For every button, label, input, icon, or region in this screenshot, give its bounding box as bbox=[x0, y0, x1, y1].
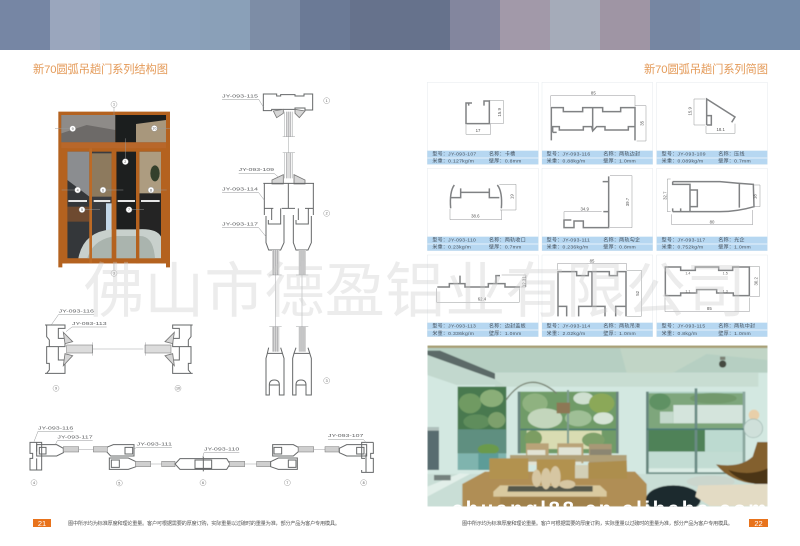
numbers: 7 bbox=[286, 481, 288, 485]
labels: JY-093-110 bbox=[204, 447, 240, 453]
labels: JY-093-116 bbox=[38, 425, 74, 431]
door callout leader lines bbox=[55, 107, 170, 270]
card caption text: 米重：0.23kg/m bbox=[432, 244, 471, 251]
card caption text: 米重：0.236kg/m bbox=[547, 244, 588, 251]
central meeting sash 6 bbox=[175, 457, 271, 471]
card caption text: 米重：2.02kg/m bbox=[547, 330, 585, 337]
labels: JY-093-113 bbox=[72, 321, 107, 327]
right sash JY-093-117 bbox=[293, 208, 311, 250]
part labels: JY-093-114 bbox=[222, 187, 258, 193]
door callout numbers: 4 bbox=[77, 188, 79, 192]
profile JY-093-116: 85 bbox=[591, 90, 596, 95]
profile JY-093-113 bbox=[437, 275, 526, 302]
section numbers: 2 bbox=[326, 212, 328, 216]
sliding door glass panels bbox=[61, 148, 166, 263]
card caption text: 名称：两轨中封 bbox=[718, 323, 755, 330]
numbers: 5 bbox=[118, 481, 120, 485]
labels bbox=[34, 425, 367, 457]
card caption text bbox=[432, 151, 755, 337]
head profile JY-093-115 bbox=[263, 94, 313, 111]
card caption text: 米重：0.336kg/m bbox=[432, 330, 474, 337]
card caption text: 米重：0.127kg/m bbox=[432, 158, 474, 165]
profile JY-093-115: 1.1 bbox=[685, 289, 690, 293]
profile JY-093-107: 15.9 bbox=[497, 108, 502, 117]
door callout numbers: 10 bbox=[152, 127, 156, 131]
profile JY-093-107: 17 bbox=[476, 128, 481, 133]
door callout numbers: 2 bbox=[124, 160, 126, 164]
profile JY-093-113: 62.4 bbox=[478, 297, 487, 302]
numbers: 9 bbox=[55, 387, 57, 391]
profile JY-093-109: 18.1 bbox=[716, 127, 725, 132]
left footnote: 图中所示均为标准厚度和理论重量。客户可根据需要的厚度订购，实际重量以过磅时的重量为准，部分产品为客户专用模具。 bbox=[68, 519, 340, 527]
section numbers: 1 bbox=[326, 99, 328, 103]
upper interlock 5 bbox=[93, 445, 134, 456]
lower glazing beads bbox=[272, 175, 305, 184]
lower interlock 7 bbox=[271, 458, 297, 469]
jamb 4 bbox=[30, 442, 93, 470]
profile JY-093-110: 38.6 bbox=[471, 214, 480, 219]
card caption text: 型号：JY-093-113 bbox=[432, 323, 476, 330]
card frames bbox=[427, 82, 767, 337]
profile JY-093-109: 15.9 bbox=[688, 107, 693, 116]
card caption text: 名称：两轨收口 bbox=[489, 237, 526, 244]
right footnote: 图中所示均为标准厚度和理论重量。客户可根据需要的厚度订购，实际重量以过磅时的重量为准，部分产品为客户专用模具。 bbox=[462, 519, 733, 527]
profile JY-093-111 bbox=[564, 176, 632, 228]
numbers bbox=[31, 480, 367, 486]
card caption text: 壁厚：0.7mm bbox=[489, 244, 522, 251]
labels: JY-093-107 bbox=[328, 433, 364, 439]
profile JY-093-114: 85 bbox=[590, 259, 595, 264]
card caption text: 名称：两轨勾企 bbox=[603, 237, 640, 244]
card caption text: 米重：0.752kg/m bbox=[662, 244, 703, 251]
card caption bars bbox=[427, 151, 767, 337]
profile JY-093-115 bbox=[665, 266, 759, 312]
numbers: 4 bbox=[33, 481, 35, 485]
upper glazing beads bbox=[273, 109, 305, 118]
profile JY-093-114 bbox=[557, 259, 641, 316]
bottom sash left bbox=[266, 348, 284, 395]
card caption text: 壁厚：1.0mm bbox=[489, 330, 522, 337]
part labels: JY-093-115 bbox=[222, 93, 258, 99]
left page number: 21 bbox=[38, 519, 46, 528]
labels: JY-093-116 bbox=[59, 309, 94, 315]
left page number bbox=[33, 519, 51, 528]
card caption text: 型号：JY-093-116 bbox=[547, 151, 590, 158]
profile JY-093-115: 1.3 bbox=[723, 289, 728, 293]
photo domain watermark: chuangl88.cn.alibaba.com bbox=[452, 497, 767, 520]
profile JY-093-115: 85 bbox=[707, 306, 712, 311]
card caption text: 型号：JY-093-109 bbox=[662, 151, 706, 158]
profile JY-093-117: 18 bbox=[753, 194, 758, 199]
lower interlock 5 bbox=[109, 458, 175, 469]
part labels: JY-093-117 bbox=[222, 222, 258, 228]
profile JY-093-116: 35 bbox=[639, 120, 644, 126]
card caption text: 米重：0.089kg/m bbox=[662, 158, 703, 165]
interior living room photo bbox=[427, 345, 768, 520]
right page number bbox=[749, 519, 768, 528]
labels: JY-093-117 bbox=[57, 435, 93, 441]
card caption text: 型号：JY-093-110 bbox=[432, 237, 476, 244]
card caption text: 名称：卡槽 bbox=[489, 151, 515, 158]
left jamb bbox=[45, 325, 93, 373]
card caption text: 名称：两轨边封 bbox=[603, 151, 640, 158]
card caption text: 壁厚：1.0mm bbox=[603, 158, 636, 165]
left sash JY-093-117 bbox=[266, 208, 284, 250]
labels: JY-093-111 bbox=[137, 441, 172, 447]
jamb 8 bbox=[339, 442, 373, 472]
lower glass upper segments bbox=[269, 250, 308, 352]
profile catalogue cards bbox=[427, 82, 767, 337]
profile JY-093-111: 34.9 bbox=[580, 207, 589, 212]
bottom sash right bbox=[293, 348, 311, 395]
right page title: 新70圆弧吊趟门系列简图 bbox=[644, 62, 768, 76]
profile JY-093-117: 80 bbox=[710, 219, 715, 224]
door leaf divider rail bbox=[61, 142, 166, 148]
card caption text: 型号：JY-093-117 bbox=[662, 237, 705, 244]
right page number: 22 bbox=[754, 519, 763, 528]
card caption text: 型号：JY-093-111 bbox=[547, 237, 590, 244]
card caption text: 壁厚：1.0mm bbox=[718, 244, 751, 251]
section numbers bbox=[324, 98, 330, 384]
side section drawing bbox=[45, 309, 193, 391]
profile JY-093-115: 30.2 bbox=[754, 277, 759, 286]
company watermark: 佛山市德盈铝业有限公司 bbox=[84, 258, 746, 325]
door photo illustration bbox=[55, 101, 170, 276]
card caption text: 壁厚：0.8mm bbox=[603, 244, 636, 251]
door callout numbers: 7 bbox=[128, 208, 130, 212]
profile JY-093-117 bbox=[662, 179, 760, 225]
part labels bbox=[222, 93, 278, 237]
vertical section drawing bbox=[222, 93, 330, 395]
card caption text: 型号：JY-093-115 bbox=[662, 323, 705, 330]
card caption text: 名称：边封盖板 bbox=[489, 323, 526, 330]
door callout numbers: 1 bbox=[113, 103, 115, 107]
door callout numbers: 3 bbox=[113, 272, 115, 276]
photo scene bbox=[427, 345, 768, 513]
profile JY-093-111: 39.7 bbox=[625, 197, 630, 206]
profile JY-093-117: 32.7 bbox=[662, 191, 667, 200]
section numbers: 3 bbox=[326, 379, 328, 383]
header colour band bbox=[0, 0, 800, 50]
card caption text: 壁厚：1.0mm bbox=[718, 330, 751, 337]
card caption text: 型号：JY-093-107 bbox=[432, 151, 477, 158]
upper interlock 7 bbox=[273, 445, 339, 456]
part labels: JY-093-109 bbox=[239, 167, 274, 173]
transom glass bbox=[61, 115, 166, 142]
numbers: 8 bbox=[363, 481, 365, 485]
profile JY-093-115: 1.4 bbox=[685, 271, 690, 275]
card caption text: 名称：压线 bbox=[718, 151, 745, 158]
profile JY-093-115: 1.5 bbox=[723, 271, 728, 275]
profile JY-093-107 bbox=[466, 100, 503, 134]
horizontal section drawing bbox=[30, 425, 373, 486]
door handles bbox=[68, 200, 160, 202]
profile JY-093-110 bbox=[450, 184, 516, 220]
left page title: 新70圆弧吊趟门系列结构图 bbox=[33, 62, 168, 76]
labels bbox=[52, 309, 107, 332]
mid rail profile JY-093-114 bbox=[263, 183, 314, 215]
door callout numbers: 9 bbox=[72, 127, 74, 131]
card caption text: 壁厚：0.7mm bbox=[718, 158, 751, 165]
profile JY-093-113: 12.31 bbox=[521, 276, 526, 287]
card caption text: 米重：0.88kg/m bbox=[547, 158, 585, 165]
card caption text: 名称：光企 bbox=[718, 237, 745, 244]
profile JY-093-114: 52 bbox=[635, 290, 640, 296]
profile JY-093-116 bbox=[551, 90, 646, 141]
upper glass bbox=[283, 112, 295, 178]
door callout numbers bbox=[70, 101, 157, 276]
door callout numbers: 8 bbox=[150, 188, 152, 192]
card caption text: 型号：JY-093-114 bbox=[547, 323, 590, 330]
numbers: 10 bbox=[176, 387, 180, 391]
right jamb bbox=[145, 325, 193, 373]
numbers bbox=[53, 385, 181, 391]
profile JY-093-109 bbox=[688, 99, 735, 133]
glass line bbox=[93, 348, 143, 350]
card caption text: 壁厚：0.8mm bbox=[489, 158, 522, 165]
numbers: 6 bbox=[202, 481, 204, 485]
card caption text: 壁厚：1.0mm bbox=[603, 330, 636, 337]
card caption text: 米重：0.8kg/m bbox=[662, 330, 697, 337]
door frame bbox=[58, 112, 170, 267]
profile JY-093-110: 19 bbox=[510, 194, 515, 199]
door callout numbers: 5 bbox=[81, 208, 83, 212]
card caption text: 名称：两轨吊滑 bbox=[603, 323, 640, 330]
door callout numbers: 6 bbox=[102, 188, 104, 192]
